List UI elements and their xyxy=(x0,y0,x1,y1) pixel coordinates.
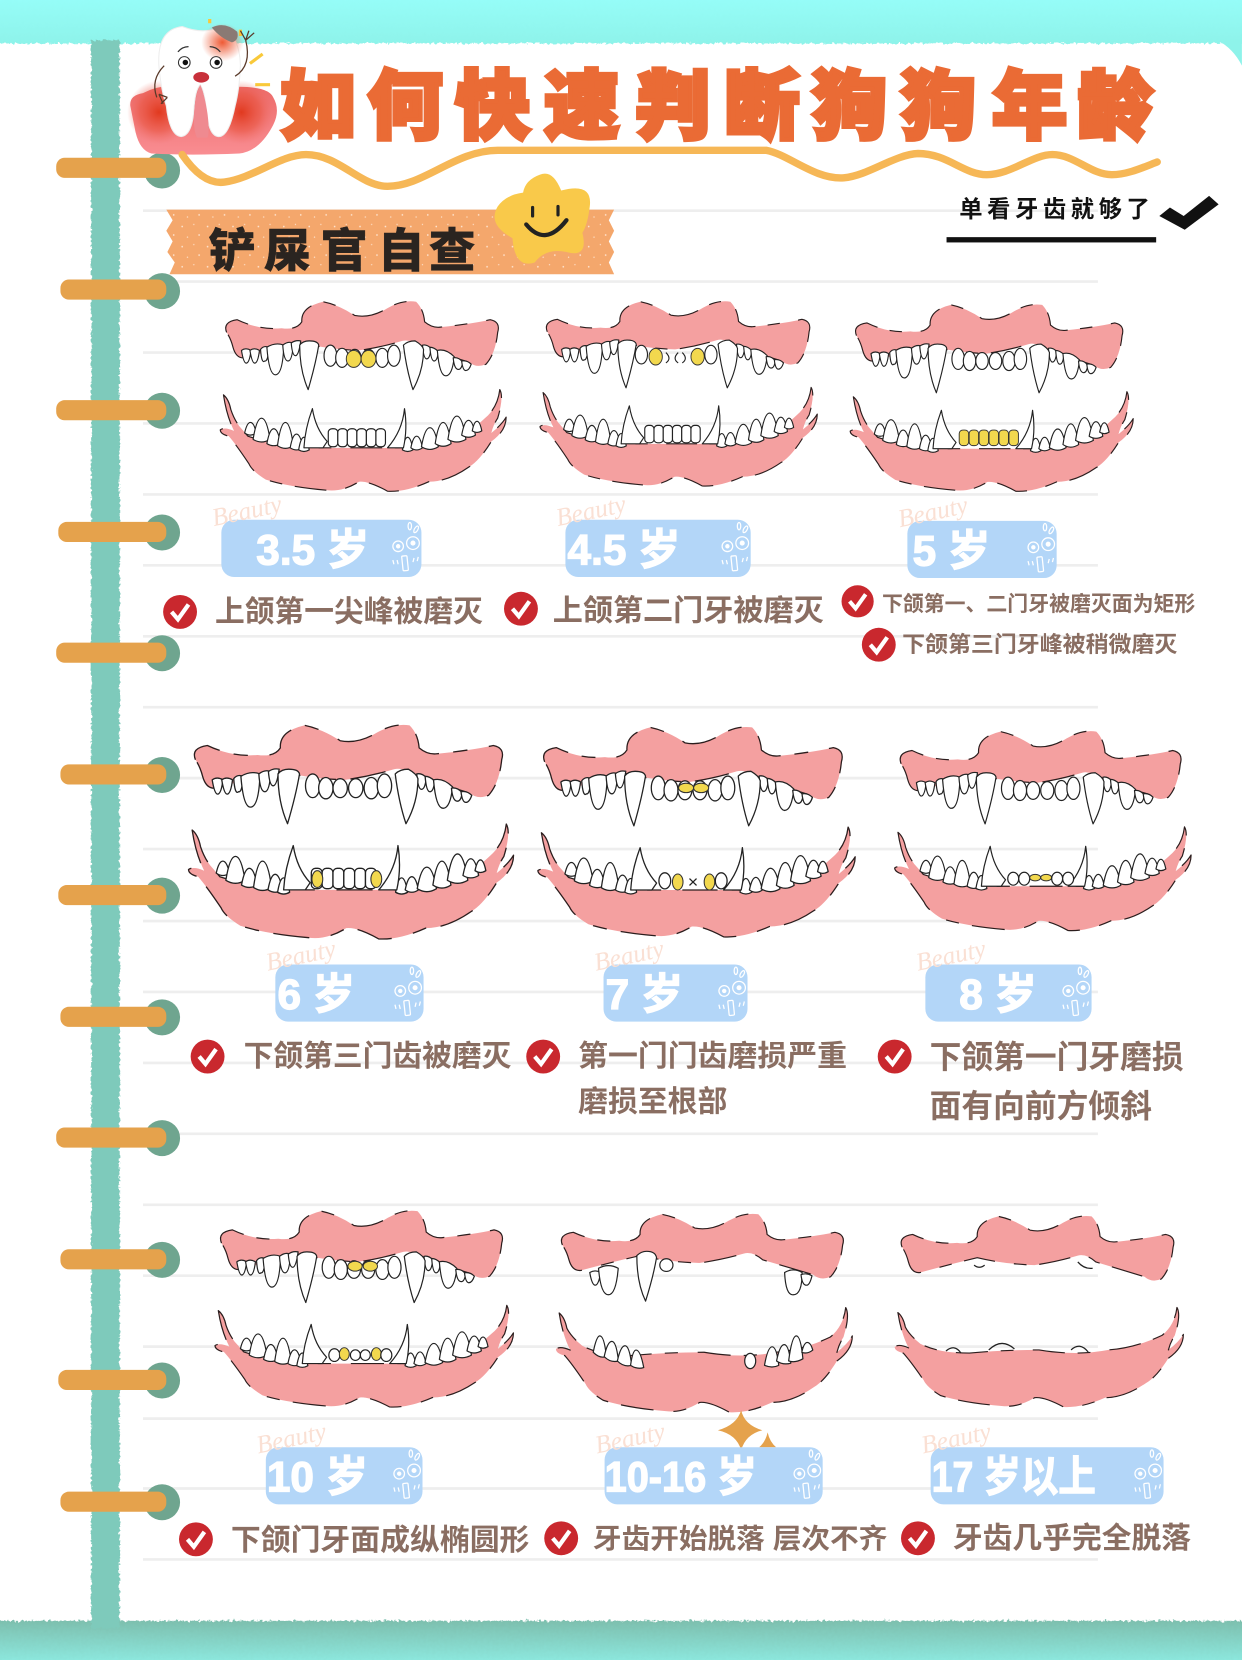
description line 1: 下颌第一、二门牙被磨灭面为矩形 xyxy=(882,592,1195,616)
check bullet xyxy=(179,1522,213,1556)
age label: Beauty xyxy=(209,490,285,532)
teeth illustration xyxy=(895,731,1191,931)
age label xyxy=(593,1417,823,1504)
age label: 7 岁 xyxy=(606,971,683,1018)
teeth illustration xyxy=(850,304,1133,491)
subtitle: 单看牙齿就够了: 单看牙齿就够了 xyxy=(959,196,1150,222)
description: 下颌第三门齿被磨灭 xyxy=(244,1040,512,1073)
teeth illustration xyxy=(538,727,855,937)
description: 牙齿几乎完全脱落 xyxy=(953,1522,1191,1555)
panel: 3.5 岁 xyxy=(163,301,506,629)
description: 牙齿开始脱落 层次不齐 xyxy=(593,1523,887,1554)
teeth illustration xyxy=(556,1214,852,1412)
heading tape: 铲屎官自查: 铲屎官自查 xyxy=(209,225,475,277)
age label: Beauty xyxy=(263,934,339,977)
age label: 6 岁 xyxy=(277,971,355,1018)
wavy title underline xyxy=(182,150,1157,186)
check bullet xyxy=(901,1521,935,1555)
age label: 10 岁 xyxy=(267,1454,368,1501)
check bullet xyxy=(862,628,896,662)
icon: black check mark xyxy=(1159,196,1219,230)
description: 下颌门牙面成纵椭圆形 xyxy=(231,1524,529,1557)
teeth illustration xyxy=(540,301,817,486)
age label xyxy=(254,1417,422,1504)
panel: 4.5 岁 xyxy=(504,301,824,627)
icon: smiling star xyxy=(495,174,590,264)
icon: hurting tooth in red gum xyxy=(127,19,277,155)
description line 2: 下颌第三门牙峰被稍微磨灭 xyxy=(902,632,1177,657)
notebook spine xyxy=(91,40,120,1628)
age label xyxy=(209,490,421,577)
description line 2: 面有向前方倾斜 xyxy=(930,1088,1152,1124)
description line 1: 下颌第一门牙磨损 xyxy=(930,1039,1184,1075)
panel: 10 岁 xyxy=(179,1211,529,1557)
age label: Beauty xyxy=(919,1417,994,1459)
age label xyxy=(895,491,1057,578)
check bullet xyxy=(163,595,197,629)
age label xyxy=(263,934,424,1022)
age label: Beauty xyxy=(592,934,667,977)
age label: 17 岁以上 xyxy=(932,1454,1096,1501)
age label: 10-16 岁 xyxy=(605,1454,757,1501)
teeth illustration xyxy=(895,1216,1183,1407)
panel: 6 岁 xyxy=(189,725,514,1073)
check bullet xyxy=(842,585,874,617)
age label xyxy=(919,1417,1164,1504)
age label: 8 岁 xyxy=(959,971,1037,1018)
teeth illustration xyxy=(189,725,514,939)
age label: Beauty xyxy=(895,491,971,533)
age label xyxy=(913,934,1092,1022)
age label xyxy=(592,934,748,1022)
age label: 3.5 岁 xyxy=(256,526,369,573)
heading tape: 铲屎官自查 xyxy=(166,210,614,277)
check bullet xyxy=(526,1040,560,1073)
ruled notebook lines xyxy=(143,211,1098,1559)
panel: 7 岁 xyxy=(526,727,855,1119)
age label: 4.5 岁 xyxy=(568,526,680,573)
age label: Beauty xyxy=(913,934,989,977)
icon: orange sparkles xyxy=(718,1410,776,1450)
panel: 8 岁 xyxy=(878,731,1191,1124)
panel: 5 岁 xyxy=(842,304,1195,662)
teeth illustration xyxy=(220,301,506,491)
description: 上颌第一尖峰被磨灭 xyxy=(215,595,483,628)
age label: 5 岁 xyxy=(913,527,990,574)
age label: Beauty xyxy=(254,1417,329,1459)
description line 2: 磨损至根部 xyxy=(578,1086,727,1119)
age label: Beauty xyxy=(553,490,629,532)
check bullet xyxy=(191,1040,225,1073)
check bullet xyxy=(504,592,538,626)
description line 1: 第一门门齿磨损严重 xyxy=(578,1040,847,1073)
title: 如何快速判断狗狗年龄 xyxy=(281,64,1154,148)
panel: 10-16 岁 xyxy=(544,1214,887,1555)
age label: Beauty xyxy=(593,1417,668,1459)
spiral rings xyxy=(56,152,180,1520)
subtitle underline xyxy=(947,237,1156,242)
age label xyxy=(553,490,751,577)
description: 上颌第二门牙被磨灭 xyxy=(553,594,824,627)
check bullet xyxy=(878,1040,912,1073)
teeth illustration xyxy=(215,1211,513,1407)
panel: 17 岁以上 xyxy=(895,1216,1191,1555)
check bullet xyxy=(544,1521,578,1555)
